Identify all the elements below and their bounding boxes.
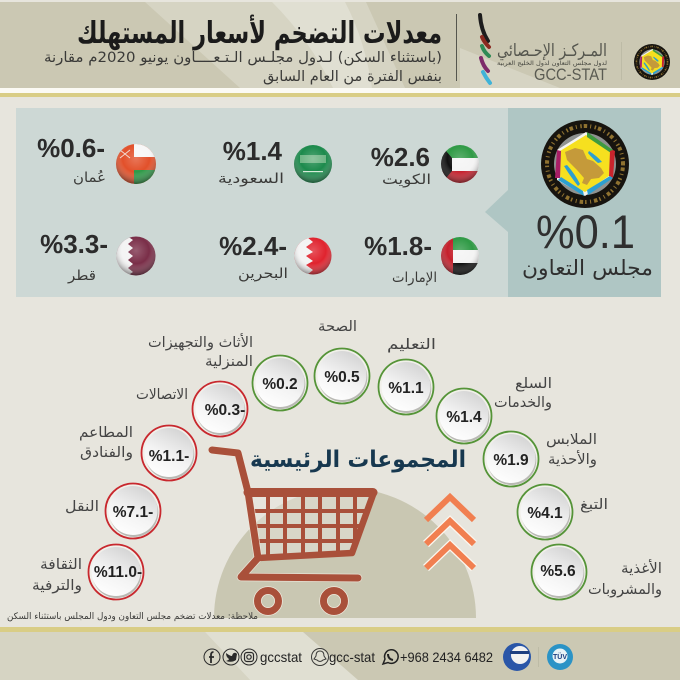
- icon: TUV badge: [547, 644, 573, 670]
- category: transport: %7.1-: [113, 504, 153, 521]
- category: food and beverages: الأغذية: [621, 559, 662, 577]
- logo: Arabic tagline: لدول مجلس التعاون لدول الخليج العربية: [497, 60, 607, 67]
- category: goods and services: السلع: [515, 376, 552, 392]
- category: goods and services: والخدمات: [494, 395, 552, 411]
- GCC value: %0.1: [536, 205, 635, 258]
- logo: GCC-STAT: GCC-STAT: [534, 65, 607, 84]
- category: restaurants and hotels: [79, 425, 196, 480]
- logo: GCC-Stat ribbon: [480, 15, 490, 83]
- category: tobacco: [518, 484, 608, 540]
- country: UAE: %1.8-: [364, 231, 432, 261]
- country: UAE: الإمارات: [392, 270, 437, 286]
- country: Kuwait: %2.6: [371, 142, 430, 172]
- country: Saudi Arabia: %1.4: [223, 136, 283, 166]
- category: furniture: المنزلية: [205, 354, 253, 370]
- title: معدلات التضخم لأسعار المستهلك: [77, 14, 442, 51]
- category: culture and recreation: الثقافة: [40, 557, 82, 573]
- category: furniture: [148, 333, 308, 410]
- subtitle line 2: بنفس الفترة من العام السابق: [263, 69, 442, 85]
- country: Bahrain: %2.4-: [219, 231, 287, 261]
- subtitle line 1: (باستثناء السكن) لـدول مجلـس الـتـعــــاون يونيو 2020م مقارنة: [44, 50, 442, 66]
- category: furniture: الأثاث والتجهيزات: [148, 333, 253, 351]
- country: UAE: [364, 236, 479, 286]
- panel: GCC total: [485, 108, 661, 297]
- icon: TUV badge: TÜV: [553, 652, 567, 661]
- country: Oman: عُمان: [73, 170, 106, 186]
- category: food and beverages: %5.6: [540, 563, 576, 580]
- icon: GCC emblem: [541, 120, 629, 208]
- category: tobacco: %4.1: [527, 505, 563, 522]
- category: restaurants and hotels: والفنادق: [80, 445, 133, 461]
- footer band: [0, 627, 680, 680]
- icon: orange chevrons: [426, 497, 474, 568]
- header divider: [456, 14, 457, 81]
- country: Saudi Arabia: [219, 142, 332, 186]
- category: restaurants and hotels: المطاعم: [79, 425, 133, 441]
- category: health: [314, 319, 370, 404]
- panel: countries: [16, 108, 508, 297]
- footnote: ملاحظة: معدلات تضخم مجلس التعاون ودول المجلس باستثناء السكن: [7, 612, 258, 622]
- country: Bahrain: [220, 236, 332, 282]
- category: education: التعليم: [387, 337, 436, 353]
- country: Kuwait: الكويت: [382, 172, 431, 188]
- category: clothing and footwear: الملابس: [546, 432, 597, 448]
- country: Bahrain: البحرين: [238, 266, 288, 282]
- category: communications: %0.3-: [205, 402, 245, 419]
- icon: shopping cart: [212, 450, 376, 612]
- category: health: الصحة: [318, 319, 357, 335]
- icon: whatsapp: [383, 650, 398, 664]
- phone number: +968 2434 6482: [400, 649, 493, 665]
- country: Saudi Arabia: السعودية: [218, 171, 284, 187]
- social handle: gccstat: [260, 649, 302, 665]
- category: culture and recreation: [32, 544, 144, 600]
- category: culture and recreation: %11.0-: [94, 564, 142, 581]
- header band: [0, 2, 680, 97]
- hill behind cart: [214, 488, 476, 618]
- GCC label: مجلس التعاون: [522, 256, 653, 280]
- category: clothing and footwear: [484, 432, 597, 486]
- icon: quality badge: [503, 643, 531, 671]
- country: Qatar: قطر: [67, 268, 96, 284]
- category: health: %0.5: [324, 369, 360, 386]
- icon: snapchat: [312, 648, 328, 666]
- category: clothing and footwear: %1.9: [493, 452, 529, 469]
- social icons: facebook, twitter, instagram: [204, 649, 257, 665]
- category: goods and services: [436, 376, 552, 444]
- logo: Arabic name: المـركـز الإحـصائي: [497, 41, 607, 61]
- category: transport: النقل: [65, 499, 99, 515]
- logo: GCC emblem small: [634, 44, 670, 80]
- category: communications: [136, 382, 248, 436]
- logo divider: [621, 42, 622, 80]
- section heading: المجموعات الرئيسية: [250, 447, 466, 473]
- category: culture and recreation: والترفية: [32, 578, 82, 594]
- category: clothing and footwear: والأحذية: [548, 450, 597, 468]
- category: communications: الاتصالات: [136, 387, 188, 403]
- category: tobacco: التبغ: [580, 497, 608, 513]
- category: furniture: %0.2: [262, 376, 298, 393]
- category: education: %1.1: [388, 380, 424, 397]
- category: transport: [65, 484, 160, 538]
- country: Qatar: %3.3-: [40, 229, 108, 259]
- country: Qatar: [40, 234, 156, 284]
- category: goods and services: %1.4: [446, 409, 482, 426]
- category: food and beverages: والمشروبات: [588, 582, 662, 598]
- snapchat handle: gcc-stat: [329, 649, 375, 665]
- country: Kuwait: [371, 142, 479, 188]
- category: food and beverages: [532, 544, 662, 600]
- category: education: [378, 337, 436, 414]
- country: Oman: [38, 138, 156, 184]
- category: restaurants and hotels: %1.1-: [149, 448, 189, 465]
- country: Oman: %0.6-: [37, 133, 105, 163]
